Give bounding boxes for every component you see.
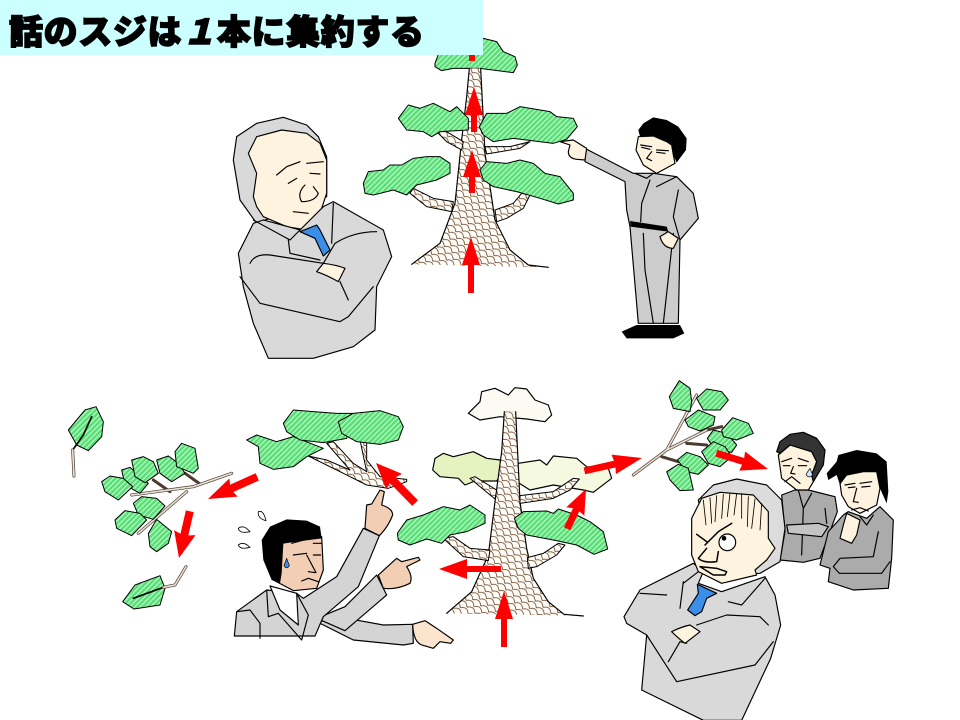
listener A sweat (806, 468, 813, 477)
bottom tree: branches going in many directions (397, 388, 612, 616)
hair (638, 117, 687, 163)
trunk fill (412, 68, 548, 267)
hair streaks (703, 493, 762, 530)
eyes and nose (641, 145, 668, 161)
foliage left (247, 435, 323, 469)
foliage right (338, 411, 403, 444)
angry boss, winking, arms crossed (624, 479, 785, 720)
branches (470, 477, 497, 499)
listener A forearm (787, 523, 828, 537)
top faded foliage (468, 388, 552, 422)
trunk fill (447, 412, 583, 616)
title text: 話のスジは１本に集約する (9, 14, 424, 52)
trunk outline (412, 68, 548, 267)
flying sweat drops (238, 511, 266, 548)
severed branch with leaves, left (102, 443, 232, 552)
raised hand (365, 490, 393, 536)
lower hand (413, 621, 453, 648)
twigs (132, 473, 232, 533)
branches (437, 132, 463, 150)
hair (262, 519, 322, 583)
foliage lower left (363, 157, 450, 195)
severed pine branch, centre left (247, 410, 407, 488)
suit lines (640, 572, 773, 682)
top foliage (435, 38, 517, 73)
face (248, 130, 327, 230)
facial features (277, 162, 323, 213)
hand in pocket (660, 232, 678, 248)
foliage upper left (398, 103, 468, 137)
foliage middle (283, 410, 353, 443)
two grey-suited listeners (777, 432, 893, 590)
falling leaf, upper left (68, 407, 103, 476)
upper right faded foliage (515, 456, 612, 492)
sweat on face (284, 558, 289, 568)
third arm (317, 618, 413, 645)
body (585, 148, 698, 323)
hand (317, 263, 345, 282)
tie (688, 584, 717, 616)
title band (0, 0, 483, 55)
hair (233, 117, 327, 223)
boss with closed eyes, arms crossed (233, 117, 392, 358)
suit (238, 202, 392, 358)
listener A folded arm (798, 490, 827, 555)
listener B hand (840, 513, 860, 543)
face (270, 537, 323, 591)
top tree arrows (462, 55, 483, 293)
tie (300, 225, 330, 256)
suit (624, 563, 781, 720)
hair (698, 479, 785, 575)
lower left foliage (397, 505, 485, 545)
listener A hair (777, 432, 825, 482)
suit and raised arm (234, 528, 379, 636)
falling leaf, lower (123, 567, 186, 609)
listener B hair (827, 450, 888, 503)
lower right foliage (514, 509, 608, 554)
shoes (622, 325, 684, 338)
leaves (122, 467, 148, 493)
lapel lines (237, 590, 308, 640)
trunk outline (447, 412, 583, 616)
upper left faded foliage (433, 452, 503, 485)
facial features (292, 538, 322, 582)
leaves (669, 381, 692, 412)
twigs (633, 395, 722, 475)
listener B suit lines (833, 515, 890, 573)
red arrows, bottom scene (168, 444, 771, 647)
branch (308, 440, 407, 488)
severed branch with leaves, right (633, 381, 753, 491)
second arm (317, 575, 387, 631)
suit lines (240, 203, 377, 322)
middle hand (378, 557, 420, 589)
eye (719, 534, 736, 551)
listener B features (845, 482, 872, 511)
face (636, 136, 675, 173)
pointing hand (560, 140, 587, 160)
shirt (270, 586, 298, 625)
listener A face (778, 445, 817, 490)
face (692, 492, 775, 583)
pupil (722, 536, 726, 541)
man pointing at tree (560, 117, 698, 338)
foliage upper right (479, 107, 577, 143)
other facial features (697, 523, 732, 575)
listener B face (840, 472, 880, 513)
foliage lower right (480, 160, 573, 204)
listener A body (780, 490, 837, 562)
listener A features (782, 458, 808, 483)
man sweating, pointing three ways (234, 490, 453, 648)
suit lines (635, 173, 680, 323)
top tree: single trunk with branches (363, 38, 577, 267)
listener B body (820, 507, 893, 590)
belt (630, 221, 668, 232)
hand (672, 625, 700, 643)
